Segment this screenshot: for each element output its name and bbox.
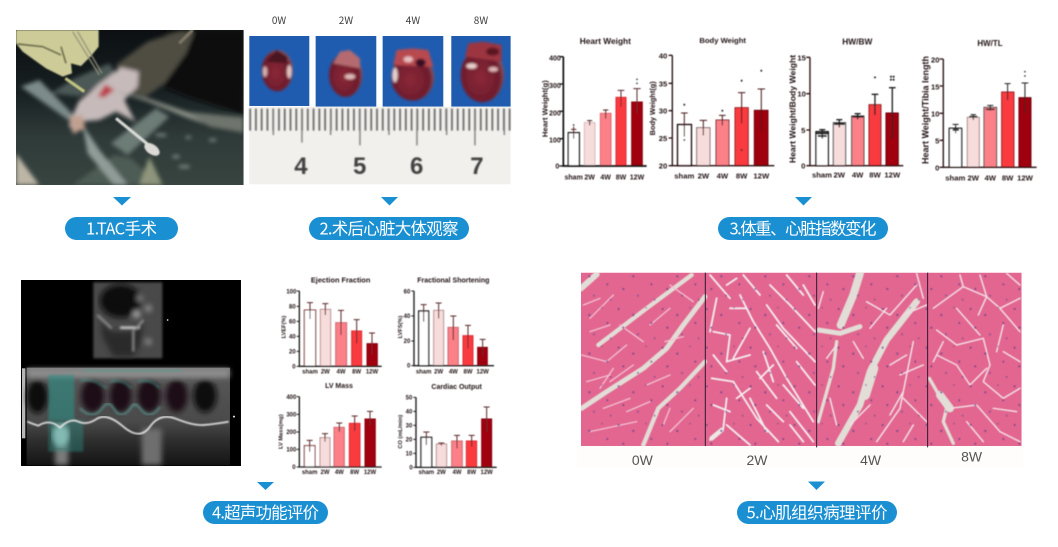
- chart: Fractional Shortening: 2W: [434, 370, 443, 376]
- chart: Heart Weight: 0: [555, 164, 559, 171]
- sector scan: [93, 282, 168, 358]
- chart: Cardiac Output: 4W: [452, 470, 462, 476]
- chart: Cardiac Output: Cardiac Output: [431, 384, 483, 391]
- arrow 4: [257, 482, 274, 490]
- chart: Fractional Shortening: Fractional Shortening: [417, 277, 489, 284]
- label 2: 2.术后心脏大体观察: [320, 216, 458, 240]
- chart: Heart Weight: 4W: [600, 174, 611, 181]
- chart: Heart Weight: sham: [565, 174, 583, 181]
- chart: HW/TL: 10: [931, 109, 940, 118]
- chart: Fractional Shortening: 60: [404, 289, 411, 295]
- chart: Heart Weight: 200: [549, 110, 561, 117]
- chart: HW/TL: Heart Weight/Tibia length: [921, 56, 931, 164]
- label 4: 4.超声功能评价: [212, 500, 319, 524]
- label 1: 1.TAC手术: [86, 216, 157, 240]
- 8W tissue: [929, 273, 1020, 443]
- chart: Fractional Shortening: sham: [416, 370, 431, 376]
- chart: Cardiac Output: CO (mL/min): [398, 415, 404, 449]
- chart: Ejection Fraction: sham: [302, 370, 318, 376]
- chart: Heart Weight: [540, 36, 647, 181]
- chart: LV Mass: 100: [286, 447, 297, 453]
- chart: Fractional Shortening: 0: [407, 364, 411, 370]
- chart: Body Weight: 40: [659, 52, 667, 61]
- chart: Heart Weight: 100: [549, 138, 561, 145]
- ruler: 4: [294, 153, 308, 180]
- chart: HW/TL: 5: [935, 136, 940, 145]
- chart: Body Weight: Body Weight: [699, 36, 746, 45]
- chart: HW/BW: 8W: [869, 171, 881, 180]
- chart: Fractional Shortening: LVFS(%): [398, 315, 404, 338]
- chart: Ejection Fraction: 0: [292, 364, 296, 370]
- chart: Fractional Shortening: 20: [404, 339, 411, 345]
- chart: Body Weight: [648, 36, 774, 181]
- chart: Fractional Shortening: [398, 277, 494, 376]
- panel: body weight and heart index charts: [540, 36, 1037, 182]
- chart: LV Mass: 0: [292, 465, 296, 471]
- chart: HW/BW: Heart Weight/Body Weight: [788, 55, 798, 163]
- chart: HW/TL: 4W: [985, 173, 997, 182]
- heart 8W: [451, 36, 511, 107]
- chart: LV Mass: LV Mass: [325, 383, 353, 390]
- chart: Ejection Fraction: Ejection Fraction: [311, 275, 371, 284]
- panel: ultrasound image: [21, 280, 241, 466]
- arrow 2: [381, 197, 398, 206]
- chart: HW/BW: 10: [797, 90, 806, 99]
- heart 2W: [316, 36, 376, 107]
- chart: Cardiac Output: 10: [406, 451, 413, 457]
- M-mode trace: [22, 368, 235, 465]
- panel: echocardiography function charts: [278, 275, 497, 476]
- label 1: [65, 216, 178, 240]
- ruler: 6: [410, 153, 423, 180]
- chart: Heart Weight: 300: [549, 83, 561, 90]
- chart: HW/BW: 15: [797, 54, 807, 63]
- chart: Heart Weight: 8W: [616, 174, 627, 181]
- chart: Body Weight: 8W: [736, 172, 748, 181]
- chart: Body Weight: sham: [674, 172, 695, 181]
- 2W tissue: [710, 275, 815, 445]
- panel: myocardial histology: [577, 273, 1023, 468]
- chart: Heart Weight: 400: [549, 56, 561, 63]
- label 5: 5.心肌组织病理评价: [746, 500, 888, 524]
- ruler: [249, 107, 511, 184]
- chart: Cardiac Output: [398, 384, 497, 476]
- chart: LV Mass: [278, 383, 382, 476]
- chart: Body Weight: 12W: [753, 172, 770, 181]
- chart: Cardiac Output: 20: [406, 437, 413, 443]
- chart: LV Mass: 4W: [335, 470, 344, 476]
- week captions: 2W: [746, 452, 768, 468]
- chart: HW/BW: sham: [812, 171, 832, 180]
- chart: Cardiac Output: sham: [418, 470, 434, 476]
- chart: LV Mass: 300: [286, 412, 297, 418]
- ruler: 7: [470, 153, 484, 180]
- chart: LV Mass: 400: [286, 395, 297, 401]
- week labels: 0W: [272, 12, 286, 27]
- chart: HW/TL: 2W: [968, 173, 980, 182]
- arrow 3: [795, 197, 812, 206]
- chart: Heart Weight: Heart Weight: [580, 36, 631, 46]
- chart: Ejection Fraction: 8W: [352, 370, 361, 376]
- week captions: 4W: [860, 452, 882, 468]
- chart: Heart Weight: 2W: [584, 174, 595, 181]
- label 3: 3.体重、心脏指数变化: [730, 216, 876, 240]
- chart: Fractional Shortening: 4W: [449, 370, 458, 376]
- chart: Fractional Shortening: 8W: [463, 370, 473, 376]
- 0W tissue: [581, 274, 705, 445]
- chart: Ejection Fraction: [281, 275, 382, 376]
- chart: HW/TL: 8W: [1002, 173, 1014, 182]
- photo: TAC surgery on mouse: [16, 30, 244, 185]
- chart: LV Mass: 8W: [350, 470, 359, 476]
- chart: HW/TL: 0: [935, 163, 939, 172]
- chart: Body Weight: 35: [659, 79, 668, 88]
- chart: LV Mass: 2W: [321, 470, 330, 476]
- chart: Ejection Fraction: 20: [289, 349, 296, 355]
- arrow 5: [808, 482, 825, 490]
- chart: Cardiac Output: 12W: [480, 470, 493, 476]
- chart: Ejection Fraction: 40: [289, 334, 296, 340]
- chart: HW/TL: 12W: [1017, 173, 1034, 182]
- chart: HW/TL: 20: [931, 55, 940, 64]
- chart: Ejection Fraction: 60: [289, 319, 296, 325]
- chart: Ejection Fraction: 12W: [366, 370, 378, 376]
- chart: Body Weight: Body Weight(g): [648, 81, 657, 135]
- 4W tissue: [818, 273, 927, 443]
- chart: Body Weight: 2W: [698, 172, 710, 181]
- week labels: 2W: [339, 12, 353, 27]
- week labels: 8W: [474, 12, 488, 27]
- chart: Ejection Fraction: 2W: [321, 370, 330, 376]
- chart: Cardiac Output: 50: [406, 396, 413, 402]
- chart: Body Weight: 4W: [717, 172, 729, 181]
- chart: Body Weight: 20: [659, 162, 667, 171]
- arrow 1: [113, 197, 131, 206]
- week labels: 4W: [406, 12, 420, 27]
- chart: Heart Weight: 12W: [630, 174, 645, 181]
- week labels: [272, 12, 488, 27]
- chart: LV Mass: 12W: [364, 470, 376, 476]
- chart: LV Mass: 200: [286, 430, 297, 436]
- chart: HW/TL: 15: [931, 82, 940, 91]
- chart: Cardiac Output: 40: [406, 409, 413, 415]
- chart: HW/BW: [788, 36, 903, 180]
- chart: LV Mass: LV Mass(mg): [278, 414, 284, 449]
- chart: HW/BW: 5: [801, 126, 806, 135]
- week captions: 0W: [632, 452, 654, 468]
- panel: gross heart observation: [249, 12, 511, 184]
- chart: Ejection Fraction: 100: [286, 289, 297, 295]
- chart: HW/BW: 0: [801, 162, 805, 171]
- chart: HW/TL: HW/TL: [977, 39, 1003, 48]
- chart: HW/BW: 4W: [852, 171, 864, 180]
- chart: Fractional Shortening: 12W: [476, 370, 489, 376]
- ruler: 5: [353, 153, 366, 180]
- chart: Heart Weight: Heart Weight(g): [540, 80, 549, 137]
- chart: LV Mass: sham: [302, 470, 317, 476]
- chart: Fractional Shortening: 40: [404, 314, 411, 320]
- chart: HW/BW: 2W: [834, 171, 846, 180]
- chart: Ejection Fraction: LVEF(%): [281, 315, 287, 338]
- heart 0W: [249, 36, 309, 106]
- week captions: 8W: [961, 449, 983, 465]
- chart: Cardiac Output: 2W: [437, 470, 446, 476]
- chart: HW/TL: [921, 39, 1037, 182]
- chart: Cardiac Output: 30: [406, 423, 413, 429]
- chart: Cardiac Output: 8W: [467, 470, 476, 476]
- chart: Body Weight: 30: [659, 107, 667, 116]
- chart: Ejection Fraction: 4W: [337, 370, 346, 376]
- chart: Body Weight: 25: [659, 134, 668, 143]
- chart: HW/BW: HW/BW: [842, 36, 872, 46]
- chart: HW/BW: 12W: [884, 171, 901, 180]
- chart: Ejection Fraction: 80: [289, 304, 296, 310]
- chart: HW/TL: sham: [945, 173, 965, 182]
- heart 4W: [383, 36, 443, 107]
- week captions: [632, 449, 983, 468]
- chart: Cardiac Output: 0: [409, 465, 413, 471]
